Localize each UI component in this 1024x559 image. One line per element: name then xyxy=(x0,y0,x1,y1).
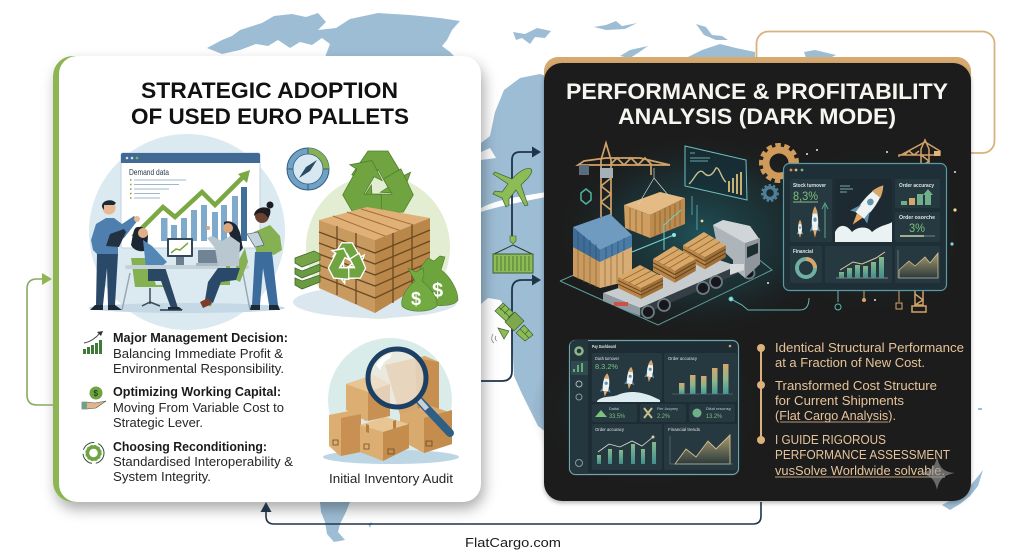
box top left xyxy=(346,375,390,421)
sparkle dots xyxy=(701,149,957,301)
widget: financial trends xyxy=(668,427,733,464)
pallet blocks xyxy=(319,207,430,313)
widget: stock turnover: Stock turnover xyxy=(793,183,827,189)
heading: performance and profitability: PERFORMANCE & PROFITABILITY xyxy=(566,79,948,104)
icon: money bags: $ xyxy=(432,280,443,302)
icon: recycle arrows xyxy=(331,151,421,232)
tan outlined frame xyxy=(756,32,994,153)
widget: key metrics row: Dttal resonsy xyxy=(706,406,731,411)
widget: key metrics row: 13.2% xyxy=(706,414,723,420)
arrow: panel to dashboard lower route xyxy=(481,274,541,381)
bullet: choosing reconditioning: Standardised Interoperability & xyxy=(113,454,293,469)
bullet list: performance points: (Flat Cargo Analysis). xyxy=(775,408,896,423)
widget: order accuracy xyxy=(899,183,935,205)
bullet: major management decision: Balancing Immediate Profit & xyxy=(113,346,283,361)
recycle stamp xyxy=(322,243,370,289)
illustration: inventory audit boxes xyxy=(323,338,459,464)
timeline xyxy=(757,344,765,444)
panel: performance analysis xyxy=(530,57,971,501)
icon: money bags: $ xyxy=(411,289,421,309)
bullet list: performance points: I GUIDE RIGOROUS xyxy=(775,432,886,447)
table and seated colleagues xyxy=(122,221,250,310)
bullet: major management decision: Environmental Responsibility. xyxy=(113,361,284,376)
widget: dash turnover: 8.3.2% xyxy=(595,364,618,371)
lower key dashboard: Pay Dashboard xyxy=(592,344,616,349)
widget: order outcome: Order osorche xyxy=(899,215,935,221)
bullet: choosing reconditioning xyxy=(83,439,293,484)
flatbed trailer xyxy=(603,258,737,308)
arrow: return route to strategic panel xyxy=(260,502,761,524)
widget: order accuracy bars xyxy=(668,356,733,394)
widget: order accuracy trend: Order accuracy xyxy=(595,427,625,432)
icon: compass xyxy=(287,148,329,190)
box right xyxy=(400,405,452,453)
box rear xyxy=(385,356,439,415)
bullet list: performance points: for Current Shipments xyxy=(775,393,904,408)
bullet: major management decision: Major Management Decision: xyxy=(113,330,288,345)
wheels xyxy=(642,268,754,318)
heading: strategic adoption: OF USED EURO PALLETS xyxy=(131,104,409,129)
magnifying glass xyxy=(368,349,450,433)
connector lines xyxy=(729,291,902,310)
label: initial inventory audit: Initial Inventory Audit xyxy=(329,471,453,486)
bullet list: performance points: PERFORMANCE ASSESSMENT xyxy=(775,447,950,462)
illustration: recycled pallet stack xyxy=(293,151,458,319)
main performance dashboard xyxy=(784,164,946,290)
arrow: panel to dashboard upper route xyxy=(512,146,541,237)
blue container xyxy=(573,214,632,268)
widget: rocket launch xyxy=(835,179,892,242)
box front mid xyxy=(360,417,409,461)
lower key dashboard xyxy=(570,340,738,474)
bullet list: performance points: Transformed Cost Structure xyxy=(775,378,937,393)
panel: strategic adoption xyxy=(53,56,481,502)
widget: order accuracy: Order accuracy xyxy=(899,183,935,189)
bullet: optimizing working capital: Strategic Lever. xyxy=(113,415,203,430)
widget: area chart xyxy=(898,250,938,278)
bullet: choosing reconditioning: System Integrity. xyxy=(113,469,211,484)
icon: cash stack xyxy=(295,251,320,289)
widget: order accuracy trend xyxy=(595,427,656,464)
widget: dash turnover: Dash turnover xyxy=(595,356,619,361)
hanging tan container xyxy=(624,168,685,238)
widget: key metrics row: Dattal xyxy=(609,406,619,411)
widget: order accuracy bars: Order accuracy xyxy=(668,356,698,361)
bullet: optimizing working capital: $ xyxy=(94,389,98,398)
icon: money bags xyxy=(402,256,458,311)
heading: strategic adoption: STRATEGIC ADOPTION xyxy=(141,78,398,103)
widget: key metrics row: 33.5% xyxy=(609,414,626,420)
person: standing colleague xyxy=(247,202,282,310)
map coastline gaps xyxy=(481,148,546,212)
icon: orange gear xyxy=(761,145,797,181)
holographic chart xyxy=(685,146,747,200)
sparkle mark xyxy=(919,456,955,490)
icon: satellite xyxy=(492,303,533,343)
bullet: optimizing working capital: Optimizing Working Capital: xyxy=(113,384,281,399)
footer: source: FlatCargo.com xyxy=(465,535,561,550)
heading: performance and profitability xyxy=(566,79,948,129)
illustration: team reviewing demand data xyxy=(89,134,285,330)
widget: stock turnover: 8,3% xyxy=(793,191,818,203)
tower crane xyxy=(578,143,670,217)
illustration: truck with pallets and containers xyxy=(560,143,772,325)
widget: order outcome: 3% xyxy=(909,223,925,235)
heading: strategic adoption xyxy=(131,78,409,129)
world map background xyxy=(207,13,983,542)
pallet loads xyxy=(683,232,726,269)
bullet: optimizing working capital: Moving From Variable Cost to xyxy=(113,400,284,415)
heading: performance and profitability: ANALYSIS (DARK MODE) xyxy=(618,104,896,129)
person: presenter xyxy=(90,200,140,310)
bullet: optimizing working capital xyxy=(82,384,284,430)
widget: stock turnover xyxy=(793,183,828,238)
icon: right crane xyxy=(899,140,940,312)
widget: dash turnover xyxy=(595,356,660,402)
widget: key metrics row: 2.2% xyxy=(657,414,671,420)
demand data window xyxy=(121,153,260,248)
bullet list: performance points: vusSolve Worldwide solvable. xyxy=(775,463,945,478)
bullet: choosing reconditioning: Choosing Reconditioning: xyxy=(113,439,267,454)
widget: key metrics row: Fler Jouyney xyxy=(657,406,678,411)
bullet list: management points xyxy=(82,330,293,484)
arrow: green feedback loop xyxy=(27,273,53,405)
widget: key metrics row xyxy=(595,406,731,420)
widget: financial donut: Financial xyxy=(793,249,813,255)
truck cab xyxy=(713,220,760,278)
bullet: major management decision xyxy=(83,330,288,376)
icon: airplane xyxy=(493,168,532,207)
widget: bar and trend chart xyxy=(836,252,888,278)
tan container xyxy=(573,247,632,288)
icon: small blue gear xyxy=(762,185,778,201)
bullet list: performance points: Identical Structural Performance xyxy=(775,340,964,355)
widget: financial trends: Financial trends xyxy=(668,427,701,432)
widget: financial donut xyxy=(793,249,815,277)
icon: hanging container xyxy=(493,236,533,273)
bullet list: performance points xyxy=(775,340,964,478)
box front left xyxy=(329,410,361,456)
widget: order outcome xyxy=(899,215,935,236)
demand data window: Demand data xyxy=(129,167,169,177)
bullet list: performance points: at a Fraction of New Cost. xyxy=(775,355,925,370)
